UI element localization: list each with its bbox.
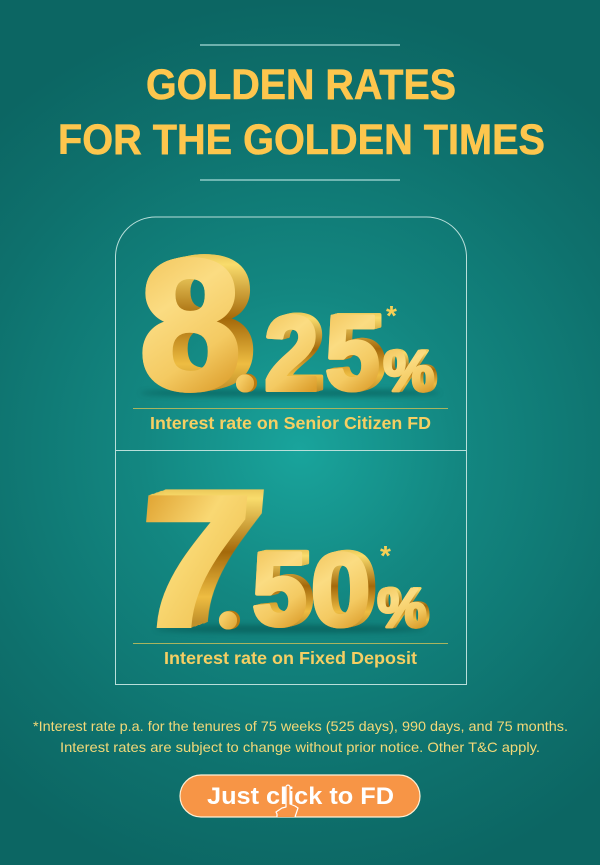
digit 2: 2 (264, 294, 319, 413)
rate: 7.50 percent (129, 459, 427, 665)
digit 7: 7 (129, 459, 256, 665)
decimal point: . (231, 292, 259, 416)
footnote: *Interest rate p.a. for the tenures of 75 weeks (525 days), 990 days, and 75 months. (33, 718, 568, 734)
asterisk: * (386, 300, 397, 331)
decimal point: . (214, 529, 242, 653)
digit 5: 5 (325, 293, 380, 412)
title block (58, 45, 545, 180)
percent sign: % (377, 576, 427, 639)
digit 8: 8 (138, 222, 242, 429)
label: senior citizen FD: Interest rate on Senior Citizen FD (150, 413, 431, 433)
digit 0: 0 (310, 531, 371, 648)
label: fixed deposit: Interest rate on Fixed Deposit (164, 648, 417, 668)
digit 5: 5 (252, 532, 307, 648)
footnote (33, 718, 568, 755)
percent sign: % (383, 339, 435, 404)
rate: 8.25 percent (138, 222, 440, 429)
gold rule (133, 408, 448, 410)
percent sign: % (377, 576, 427, 639)
digit 8: 8 (138, 222, 242, 429)
title line 2: FOR THE GOLDEN TIMES (58, 116, 545, 164)
footnote: Interest rates are subject to change without prior notice. Other T&C apply. (60, 739, 540, 755)
decimal point: . (231, 292, 259, 416)
percent sign: % (383, 339, 435, 404)
title line 1: GOLDEN RATES (146, 61, 456, 109)
decimal point: . (214, 529, 242, 653)
digit 0: 0 (310, 531, 371, 648)
digit 5: 5 (325, 293, 380, 412)
button: just click to FD (180, 775, 420, 817)
digit 7: 7 (129, 459, 256, 665)
digit 2: 2 (264, 294, 319, 413)
button: just click to FD: Just click to FD (207, 783, 394, 810)
panel: rates card (116, 217, 466, 684)
digit 5: 5 (252, 532, 307, 648)
panel divider (115, 450, 467, 452)
asterisk: * (380, 540, 391, 571)
gold rule (133, 642, 448, 644)
icon: pointing hand (276, 785, 298, 817)
